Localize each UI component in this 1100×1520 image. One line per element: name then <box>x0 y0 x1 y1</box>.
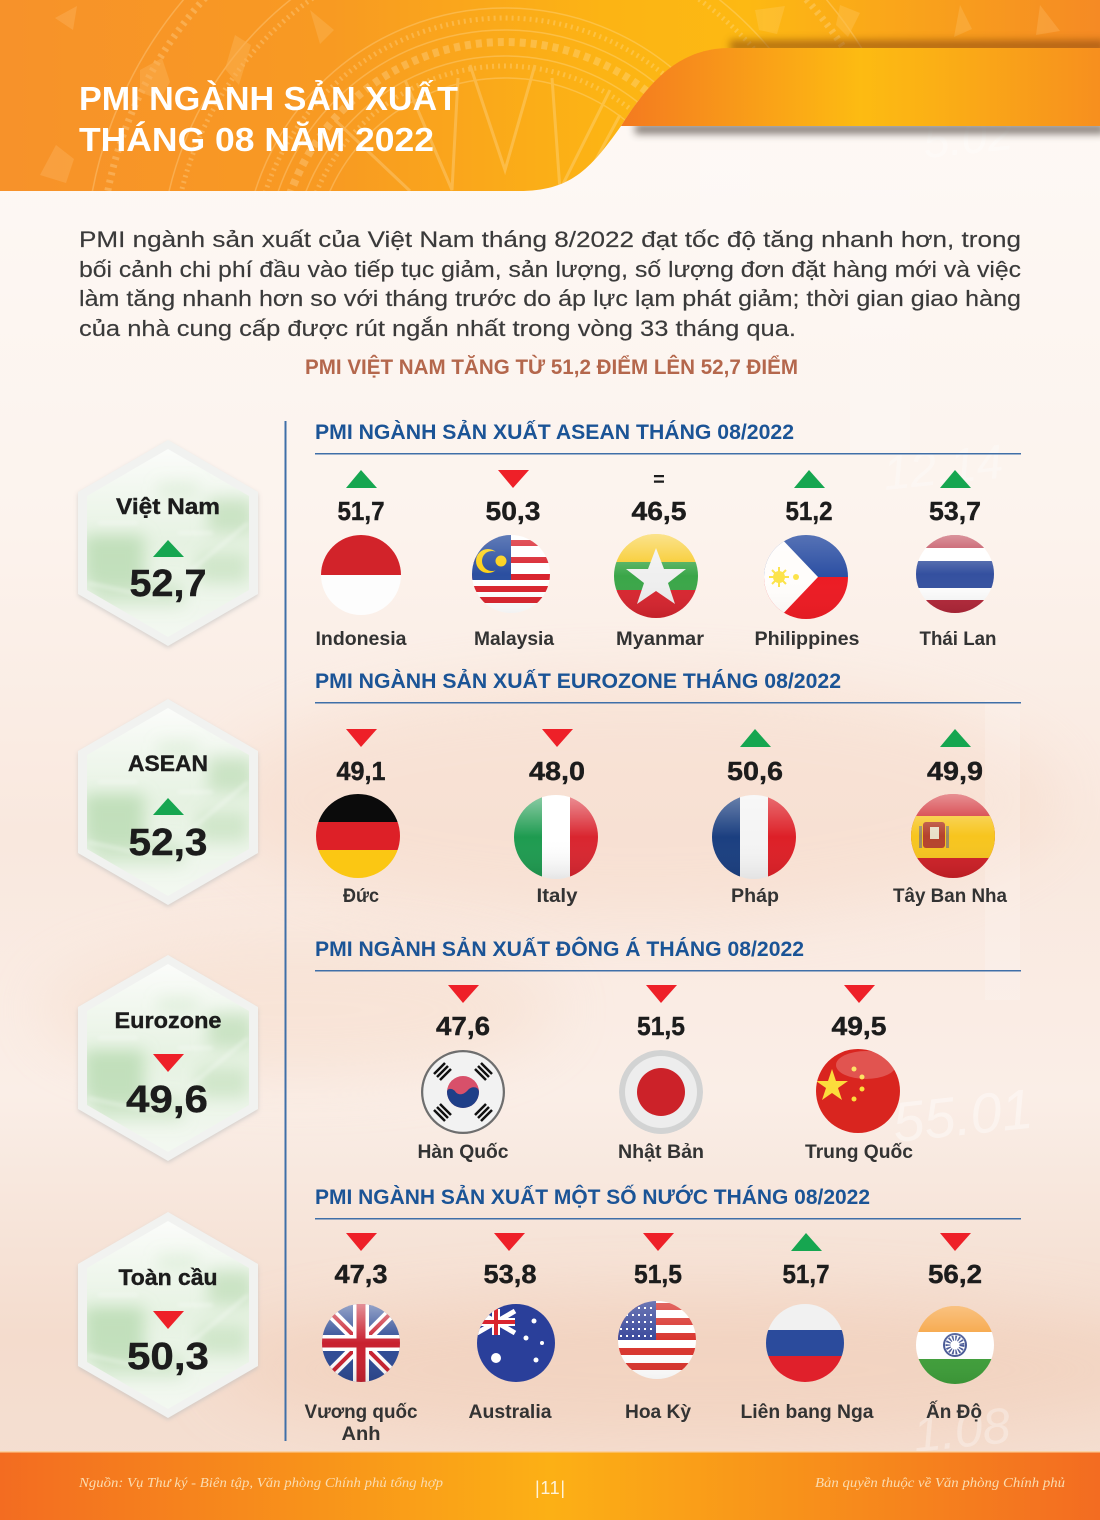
country: Hoa Kỳ: 51,5 <box>634 1259 682 1289</box>
country: Liên bang Nga: 51,7 <box>782 1259 830 1289</box>
country: Malaysia <box>472 470 554 650</box>
footer bar: Nguồn: Vụ Thư ký - Biên tập, Văn phòng Chính phủ tổng hợp <box>78 1476 443 1491</box>
panel: ASEAN <box>315 421 1021 650</box>
country: Thái Lan: 53,7 <box>929 496 981 526</box>
country: Nhật Bản <box>618 985 704 1163</box>
heading: Eurozone: PMI NGÀNH SẢN XUẤT EUROZONE THÁNG 08/2022 <box>315 670 841 693</box>
country: Thái Lan: Thái Lan <box>920 629 996 650</box>
country: Philippines: Philippines <box>754 629 860 650</box>
footer bar <box>0 1451 1100 1520</box>
country: Hàn Quốc <box>418 985 509 1163</box>
country: Italy: Italy <box>536 886 578 907</box>
hexagon: Việt Nam: 52,7 <box>130 563 206 605</box>
intro paragraph: của nhà cung cấp được rút ngắn nhất trong vòng 33 tháng qua. <box>79 316 796 341</box>
country: Nhật Bản: 51,5 <box>637 1011 685 1041</box>
country: Australia <box>468 1233 555 1423</box>
country: Trung Quốc: 49,5 <box>832 1011 886 1041</box>
country: Liên bang Nga <box>740 1233 874 1423</box>
country: Myanmar <box>614 469 705 650</box>
country: Vương quốc Anh: Vương quốc <box>304 1402 418 1423</box>
hexagon: Toàn cầu <box>78 1212 258 1420</box>
heading: Đông Á: PMI NGÀNH SẢN XUẤT ĐÔNG Á THÁNG 08/2022 <box>315 937 804 961</box>
intro paragraph: bối cảnh chi phí đầu vào tiếp tục giảm, sản lượng, số lượng đơn đặt hàng mới và việc <box>79 257 1021 282</box>
country: Australia: 53,8 <box>484 1259 536 1289</box>
hexagon: Việt Nam: Việt Nam <box>116 494 220 519</box>
title: PMI NGÀNH SẢN XUẤT <box>79 80 458 117</box>
country: Malaysia: Malaysia <box>474 629 554 650</box>
ribbon <box>621 40 1100 134</box>
country: Pháp: 50,6 <box>727 756 783 786</box>
hexagon: ASEAN: ASEAN <box>128 751 208 776</box>
country: Trung Quốc <box>805 985 913 1163</box>
footer bar: Bản quyền thuộc về Văn phòng Chính phủ <box>815 1476 1065 1491</box>
heading: ASEAN: PMI NGÀNH SẢN XUẤT ASEAN THÁNG 08/2022 <box>315 421 794 444</box>
intro paragraph: làm tăng nhanh hơn so với tháng trước do áp lực lạm phát giảm; thời gian giao hàng <box>79 286 1021 311</box>
country: Hoa Kỳ <box>618 1233 696 1423</box>
page background: 1.08 <box>910 1397 1013 1463</box>
panel: một số nước <box>304 1185 1021 1445</box>
page background: 55.01 <box>890 1077 1036 1154</box>
country: Indonesia: Indonesia <box>316 629 407 650</box>
panel: Eurozone <box>315 670 1021 907</box>
country: Myanmar: = <box>653 469 665 491</box>
country: Ấn Độ: Ấn Độ <box>926 1401 982 1423</box>
country: Italy: 48,0 <box>529 756 585 786</box>
country: Myanmar: 46,5 <box>632 496 686 526</box>
page background: 5.02 <box>921 107 1015 168</box>
country: Tây Ban Nha <box>893 729 1007 907</box>
country: Hàn Quốc: Hàn Quốc <box>418 1142 509 1163</box>
country: Philippines: 51,2 <box>786 496 832 526</box>
hexagon: Eurozone: 49,6 <box>126 1079 208 1121</box>
country: Vương quốc Anh <box>304 1233 418 1445</box>
country: Vương quốc Anh: Anh <box>342 1424 380 1445</box>
hexagon: ASEAN <box>78 699 258 907</box>
country: Ấn Độ <box>916 1233 994 1423</box>
panel: Đông Á <box>315 937 1021 1163</box>
country: Tây Ban Nha: Tây Ban Nha <box>893 886 1007 907</box>
country: Italy <box>514 729 598 907</box>
title: THÁNG 08 NĂM 2022 <box>79 121 434 158</box>
subheading: PMI VIỆT NAM TĂNG TỪ 51,2 ĐIỂM LÊN 52,7 ĐIỂM <box>305 355 798 379</box>
heading: một số nước: PMI NGÀNH SẢN XUẤT MỘT SỐ NƯỚC THÁNG 08/2022 <box>315 1185 870 1209</box>
title <box>79 80 458 158</box>
country: Pháp <box>712 729 796 907</box>
country: Thái Lan <box>916 470 996 650</box>
page background: 12.14 <box>881 436 1006 501</box>
country: Ấn Độ: 56,2 <box>928 1259 982 1289</box>
intro paragraph <box>79 227 1021 341</box>
hexagon: ASEAN: 52,3 <box>128 822 208 864</box>
country: Australia: Australia <box>468 1402 552 1423</box>
country: Đức: Đức <box>343 886 379 907</box>
country: Indonesia: 51,7 <box>338 496 384 526</box>
country: Tây Ban Nha: 49,9 <box>927 756 983 786</box>
footer bar: |11| <box>535 1478 565 1498</box>
country: Pháp: Pháp <box>731 886 779 907</box>
intro paragraph: PMI ngành sản xuất của Việt Nam tháng 8/2022 đạt tốc độ tăng nhanh hơn, trong <box>79 227 1021 252</box>
country: Myanmar: Myanmar <box>616 629 705 650</box>
country: Malaysia: 50,3 <box>486 496 540 526</box>
country: Hàn Quốc: 47,6 <box>436 1011 490 1041</box>
country: Đức <box>316 729 400 907</box>
country: Liên bang Nga: Liên bang Nga <box>740 1402 874 1423</box>
country: Trung Quốc: Trung Quốc <box>805 1142 913 1163</box>
vertical divider <box>284 421 286 1441</box>
country: Indonesia <box>316 470 407 650</box>
country: Vương quốc Anh: 47,3 <box>334 1259 388 1289</box>
hexagon: Việt Nam <box>78 440 258 648</box>
hexagon: Eurozone <box>78 955 258 1163</box>
country: Nhật Bản: Nhật Bản <box>618 1142 704 1163</box>
country: Đức: 49,1 <box>336 756 386 786</box>
hexagon: Toàn cầu: Toàn cầu <box>118 1265 218 1290</box>
hexagon: Toàn cầu: 50,3 <box>127 1336 209 1378</box>
hexagon: Eurozone: Eurozone <box>114 1008 222 1033</box>
country: Hoa Kỳ: Hoa Kỳ <box>625 1402 691 1423</box>
country: Philippines <box>754 470 860 650</box>
header banner <box>0 0 1100 191</box>
